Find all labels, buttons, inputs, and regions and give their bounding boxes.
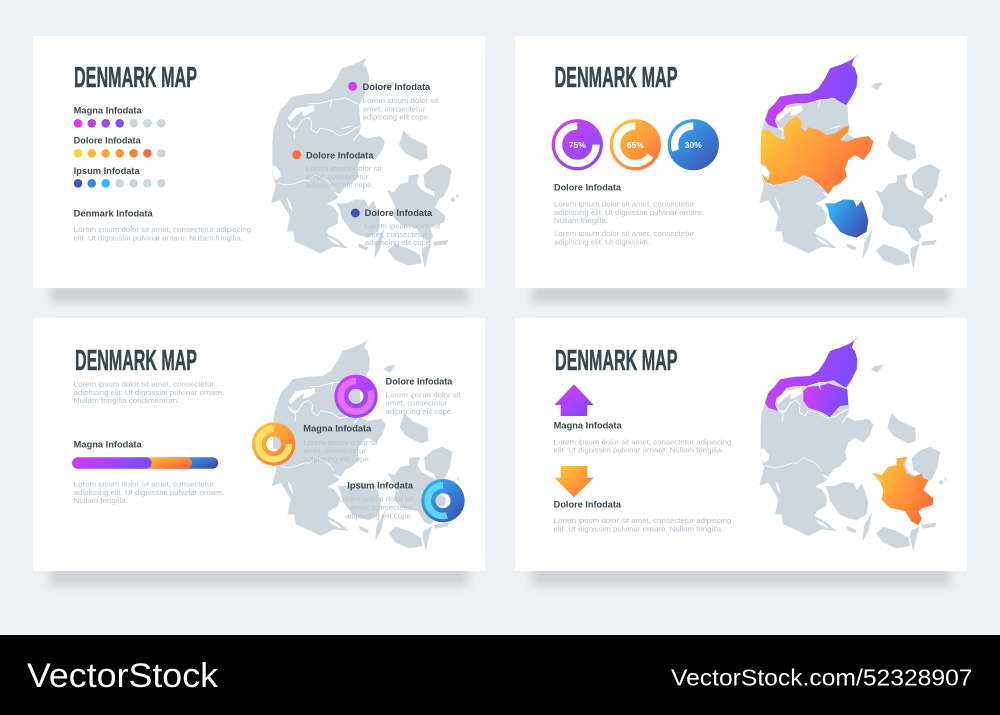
callout: Magna: Lorem ipsum dolor sit [303,438,379,447]
text block: intro: adipiscing elit. Ut dignissim pulvinar ornare. [74,388,224,397]
heading: Magna Infodata: Magna Infodata [74,440,143,450]
card shadows [50,284,950,586]
text block: Denmark Infodata: Lorem ipsum dolor sit amet, consectetur adipiscing [74,225,251,234]
text block: Magna: Lorem ipsum dolor sit amet, consectetur adipiscing [554,437,731,446]
text block: Dolore Infodata: Lorem ipsum dolor sit amet, consectetur [554,200,695,209]
panel: top right, percentages [515,36,967,288]
callout: middle [292,150,382,190]
text block: Denmark Infodata: Denmark Infodata [74,208,154,218]
text block: Denmark Infodata: elit. Ut dignissim pulvinar ornare. Nullam fringilla. [74,233,243,242]
map: Denmark grey [271,53,458,269]
icon: down arrow [554,466,594,497]
callout: south [351,208,441,247]
donut: 65%: 65% [627,140,644,150]
callout: Dolore: Dolore Infodata [386,376,453,386]
callout: south: Lorem ipsum dolor sit [365,222,441,231]
text block: Magna [554,421,731,455]
text block: below bar: Nullam fringilla. [74,496,128,505]
text block: Magna: elit. Ut dignissim pulvinar ornare. Nullam fringilla. [554,446,723,455]
donut icon: orange [252,422,295,466]
footer logo text: VectorStock [27,657,219,695]
callout: Ipsum: Lorem ipsum dolor sit [338,495,414,504]
text block: intro [74,380,224,405]
text block: Magna: Magna Infodata [554,421,623,431]
stacked bar [72,457,218,469]
donut: 30%: 30% [685,140,702,150]
callout: Ipsum [338,480,414,520]
footer band [0,635,1000,715]
donut: 30% [668,119,719,170]
text block: Dolore: elit. Ut dignissim pulvinar ornare. Nullam fringilla. [554,524,723,533]
callout: middle: adipiscing elit cope. [306,181,374,190]
text block: intro: Lorem ipsum dolor sit amet, consectetur [74,380,214,389]
callout: middle: amet, consectetur [306,172,369,181]
callout: Dolore: adipiscing elit cope. [386,407,453,416]
icon: up arrow [554,384,594,416]
title: DENMARK MAP [75,345,197,377]
callout: north: Lorem ipsum dolor sit [363,96,439,105]
text block: Dolore: Dolore Infodata [554,499,622,509]
callout: middle: Dolore Infodata [306,150,375,160]
callout: Dolore: Lorem ipsum dolor sit [386,390,462,399]
callout: Dolore [386,376,462,416]
donut icon: purple [334,375,378,418]
callout: middle: Lorem ipsum dolor sit [306,164,382,173]
text block: Dolore Infodata: Dolore Infodata [554,183,622,193]
text block: Dolore: Lorem ipsum dolor sit amet, consectetur adipiscing [554,516,731,525]
legend: Dolore [74,136,166,158]
callout: north [348,82,439,121]
text block: Dolore Infodata: Nullam fringilla. [554,216,608,225]
panel: top left, legend dots [33,36,485,288]
legend: Ipsum [74,166,166,188]
text block: Dolore Infodata: Lorem ipsum dolor sit amet, consectetur [554,229,695,238]
callout: south: Dolore Infodata [365,208,433,218]
text block: below bar [74,480,224,505]
legend: Magna: Magna Infodata [74,105,143,115]
panel: bottom right, arrows [515,318,967,571]
text block: below bar: adipiscing elit. Ut dignissim pulvinar ornare. [74,488,224,497]
legend: Dolore: Dolore Infodata [74,136,142,146]
callout: south: amet, consectetur [365,230,428,239]
donut: 75% [552,119,603,170]
donut icon: blue [421,479,465,522]
map: Denmark grey [272,336,459,552]
callout: Dolore: amet, consectetur [386,399,448,408]
map: coloured regions [759,53,947,269]
text block: Dolore Infodata [554,183,704,246]
legend: Ipsum: Ipsum Infodata [74,166,141,176]
text block: Dolore [554,499,731,533]
title: DENMARK MAP [74,62,197,94]
callout: Ipsum: Ipsum Infodata [347,480,414,490]
callout: Magna: amet, consectetur [303,446,366,455]
callout: south: adipiscing elit cope. [365,238,432,247]
callout: Magna [303,424,379,464]
map: coloured regions [759,336,947,552]
callout: north: amet, consectetur [363,104,426,113]
footer url: VectorStock.com/52328907 [671,665,972,691]
donut: 65% [610,119,661,170]
title: DENMARK MAP [555,345,678,377]
donut: 75%: 75% [569,140,586,150]
callout: Ipsum: amet, consectetur [350,503,413,512]
callout: Magna: adipiscing elit cope. [303,455,371,464]
text block: Dolore Infodata: adipiscing elit. Ut dignissim pulvinar ornare. [554,208,704,217]
callout: Magna: Magna Infodata [303,424,372,434]
callout: north: Dolore Infodata [363,82,431,92]
panel: bottom left, donut callouts [33,318,485,571]
callout: north: adipiscing elit cope. [363,112,430,121]
text block: below bar: Lorem ipsum dolor sit amet, consectetur [74,480,214,489]
title: DENMARK MAP [554,62,678,94]
legend: Magna [74,105,166,128]
text block: Dolore Infodata: adipiscing elit. Ut dignissim. [554,237,650,246]
text block: intro: Nullam fringilla condimentum. [74,396,179,405]
text block: Denmark Infodata [74,208,251,242]
callout: Ipsum: adipiscing elit cope. [345,511,413,520]
